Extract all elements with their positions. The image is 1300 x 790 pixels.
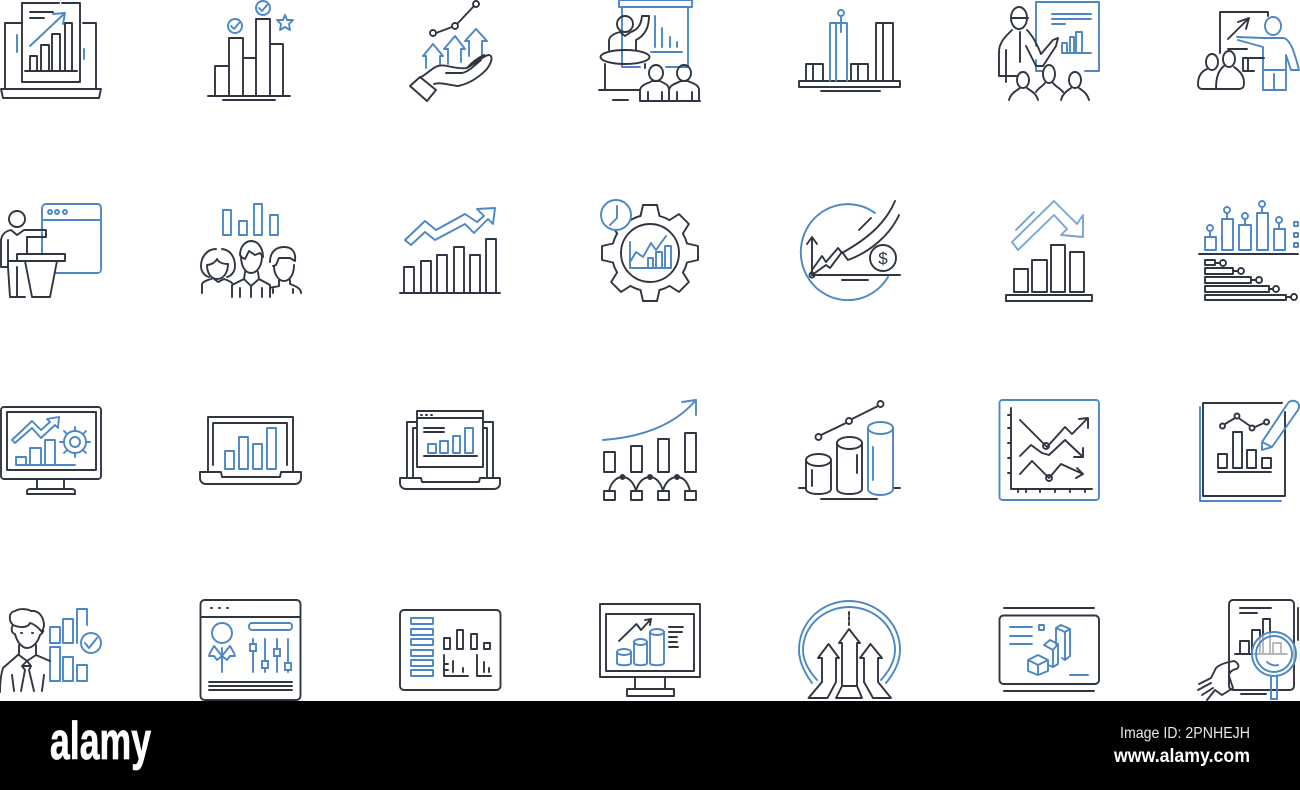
icon: trainer with arrow board and two attendees [1198, 12, 1299, 90]
icon: cylinder chart with trend line [799, 401, 900, 499]
footer: black watermark bar [0, 701, 1300, 790]
icon: financial growth curve with dollar [801, 201, 900, 300]
icon: laptop with blue bars [200, 417, 301, 484]
icon: growth curve with linked bars [603, 400, 696, 500]
icon: dashboard panel with stacked rows and bars [400, 610, 500, 690]
icon: rising zigzag arrow over bars [400, 208, 500, 293]
icon: line chart in blue frame [1000, 400, 1099, 500]
icon: monitor with chart and gear [1, 407, 101, 494]
footer image id: Image ID: 2PNHEJH [1120, 725, 1250, 742]
icon: falling arrow over bars [1006, 201, 1092, 301]
icon: businessman with charts and check [0, 609, 101, 692]
icon: three arrows inside arcs [799, 601, 900, 698]
icon: presentation screen with isometric chart [1000, 608, 1099, 691]
icon: gear with clock and chart [601, 200, 698, 301]
icon: column chart on base [799, 10, 900, 91]
icon: financial growth curve with dollar: $ [878, 249, 888, 268]
icon: laptop with browser chart [400, 411, 500, 489]
icon: vertical and horizontal lollipop charts [1199, 201, 1298, 300]
icon: laptop with report chart [1, 3, 101, 98]
icon: presenter at podium with audience [599, 0, 700, 101]
icon: team with blue bars [201, 204, 301, 297]
icon: bar chart with checks and star [208, 1, 293, 100]
icon: monitor with cylinder chart [600, 604, 700, 696]
icon: tablet report under magnifier with hand [1198, 600, 1298, 700]
footer logo: alamy [50, 712, 151, 771]
icon: presenter pointing at board with audience [999, 2, 1099, 100]
icon: document chart with pencil [1200, 401, 1299, 501]
icon: browser dashboard with sliders [200, 600, 300, 700]
footer website: www.alamy.com [1113, 746, 1250, 767]
icon: presenter at lectern with window [1, 204, 101, 297]
icon: hand holding growth arrows [410, 1, 492, 101]
